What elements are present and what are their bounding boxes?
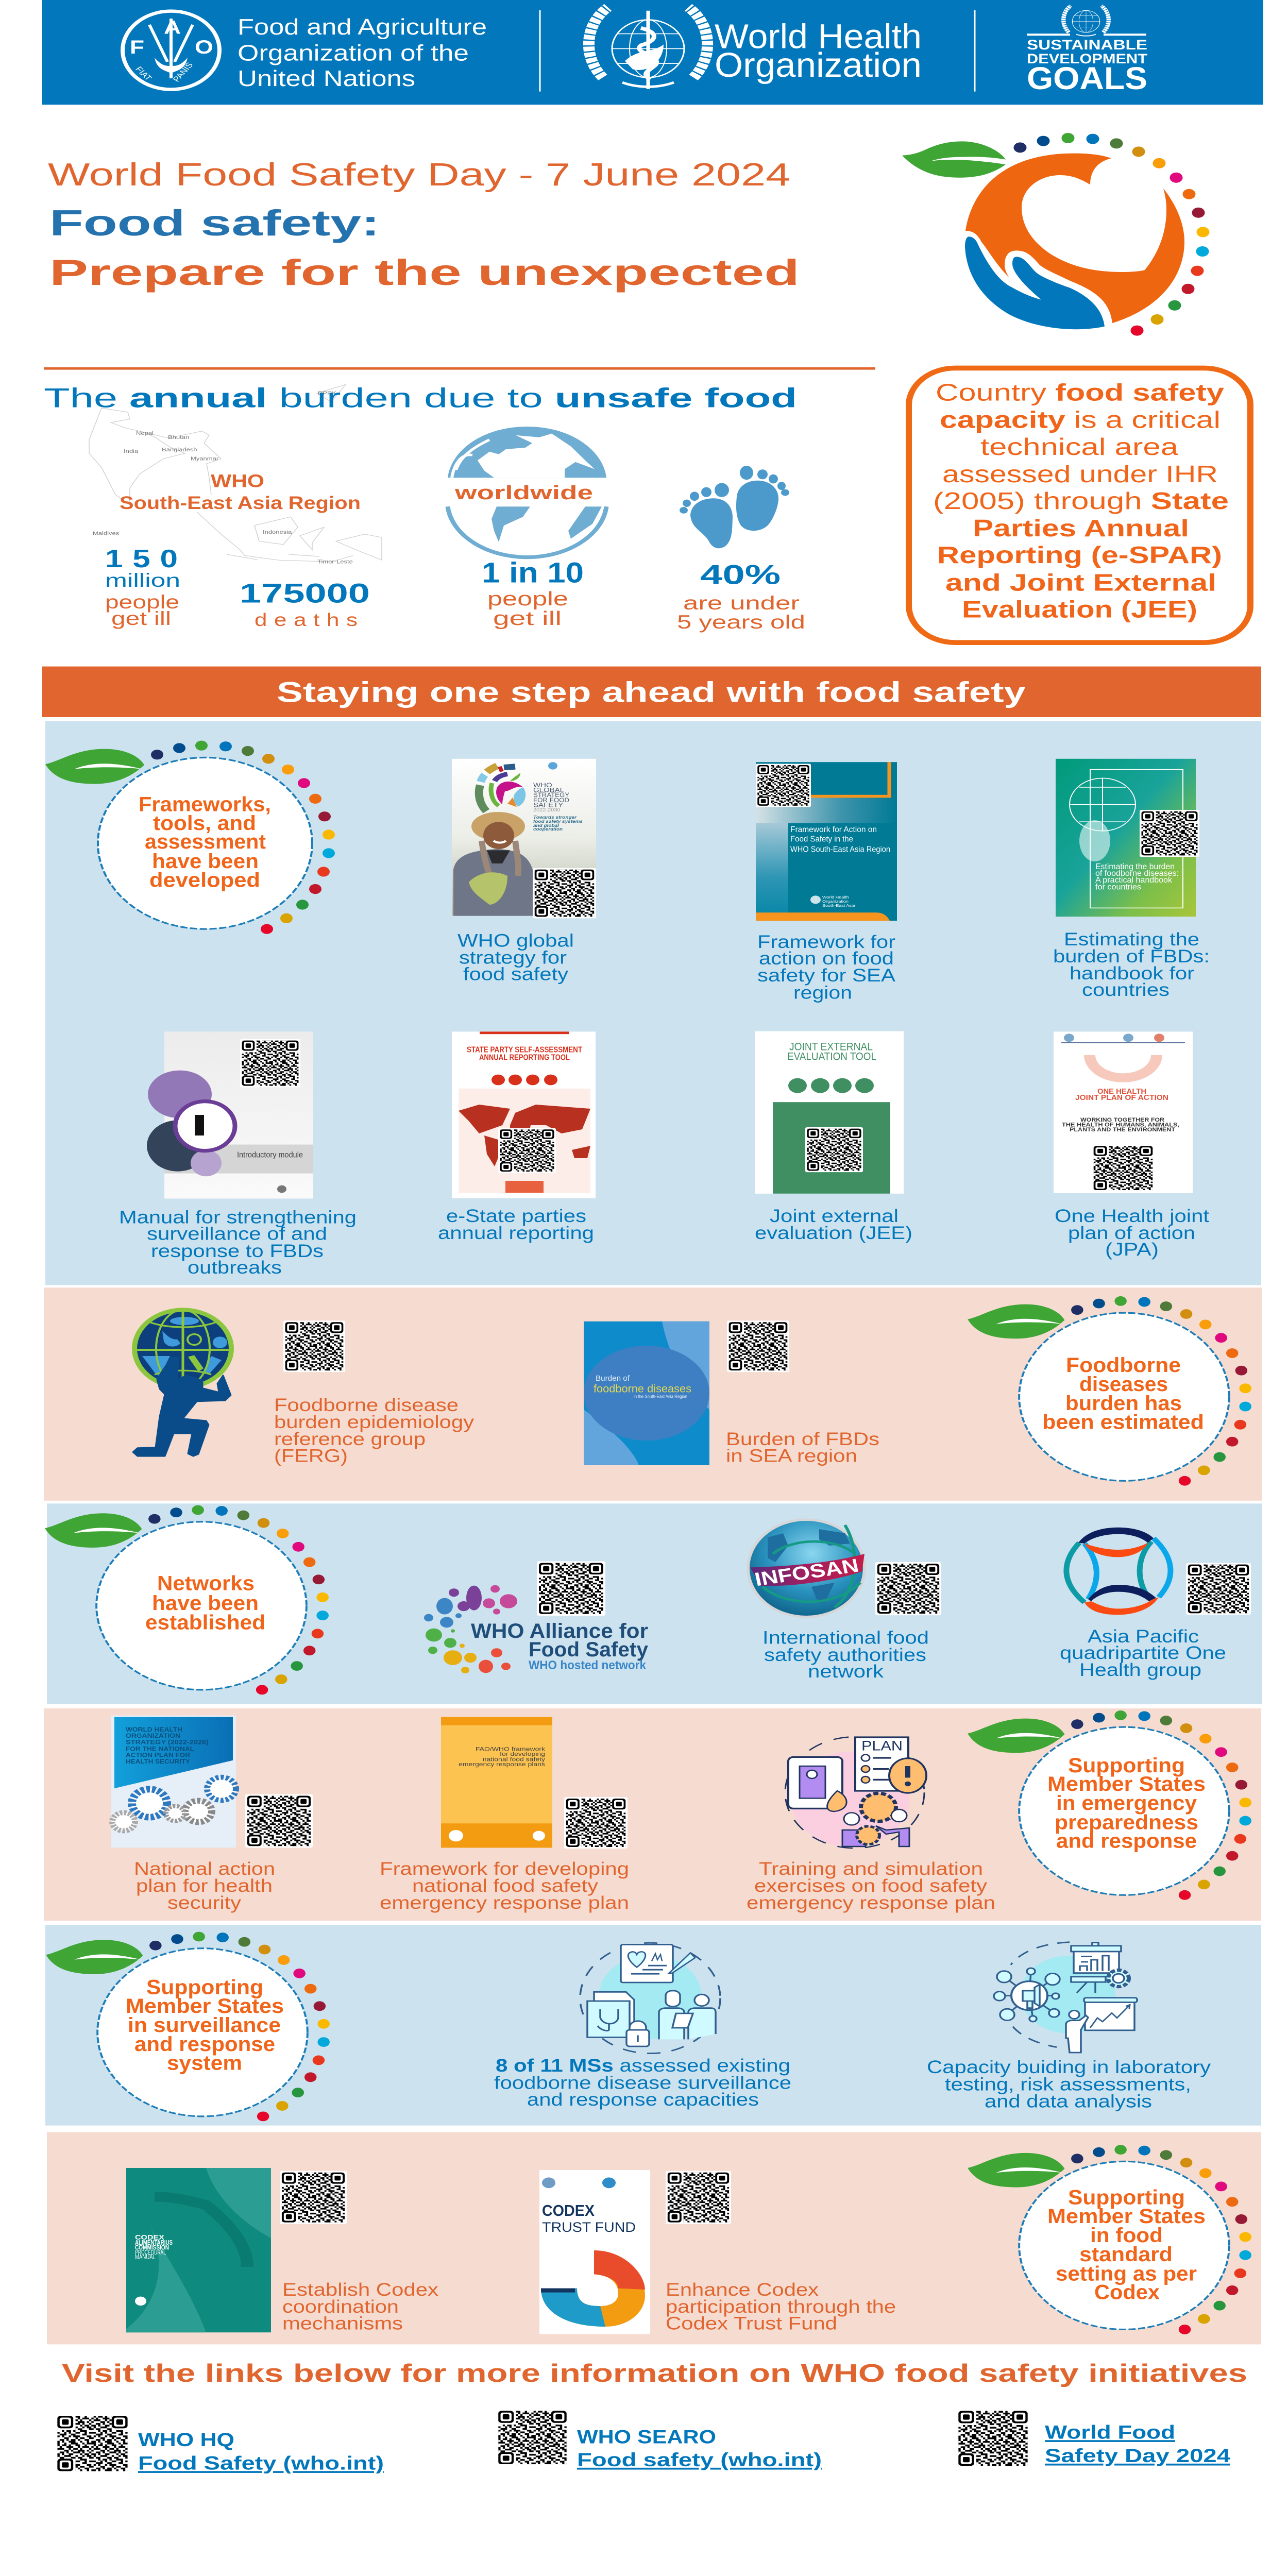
book: framework for action: Organization [822,900,849,904]
labels: bottom row: surveillance of and [147,1224,327,1244]
map: WHO South-East Asia Region: Bangladesh [162,447,197,453]
label: training: Training and simulation [759,1859,983,1879]
book: national action plan: ACTION PLAN FOR [126,1752,190,1758]
book: Codex Trust Fund: CODEX [542,2202,595,2219]
book: framework for action: WHO South-East Asia Region [790,844,890,854]
stat: 40% [677,560,805,633]
label: INFOSAN: International food [762,1628,929,1648]
label: Codex Trust Fund: Enhance Codex [666,2280,819,2300]
QR: framework emergency response [564,1797,628,1849]
badge: burden estimated: burden has [1065,1392,1182,1415]
stat: 1 in 10: 1 in 10 [482,557,584,589]
title block: Prepare for the unexpected [49,252,800,293]
link block: World Food Safety Day: Safety Day 2024 [1045,2445,1230,2466]
book: framework for action [756,762,897,921]
badge: networks: Networks [157,1571,255,1595]
title block: Food safety: [49,202,380,243]
label: INFOSAN [762,1628,929,1682]
badge: surveillance [46,1932,330,2121]
book: state party annual reporting: ANNUAL REPORTING TOOL [479,1053,570,1062]
labels: top row: handbook for [1070,963,1194,984]
map: WHO South-East Asia Region: Indonesia [263,529,292,535]
badge: burden estimated: Foodborne [1066,1353,1181,1377]
labels: top row [457,929,1210,1003]
logo: Asia Pacific quadripartite [1066,1528,1171,1615]
label: Codex coordination: coordination [282,2297,399,2317]
stat: South-East Asia: 175000 [240,578,370,608]
book: framework emergency response: for developing [500,1751,545,1757]
label: FERG: (FERG) [274,1446,348,1466]
SDG logo: GOALS [1027,61,1147,96]
QR: Codex manual [280,2171,347,2224]
stat: 40%: 5 years old [677,611,805,633]
label: Codex coordination: mechanisms [282,2314,403,2334]
logo: WHO Alliance for Food Safety [424,1585,648,1673]
QR: Alliance [537,1561,605,1616]
labels: bottom row [119,1206,1209,1278]
icon: globe: worldwide [454,482,593,504]
stat: South-East Asia: people [105,591,179,613]
badge: networks: have been [152,1591,259,1615]
book: burden of FBDs: foodborne diseases [594,1383,691,1395]
map: WHO South-East Asia Region: DPRK [318,391,336,396]
map: WHO South-East Asia Region: Maldives [93,531,119,536]
labels: top row: WHO global [457,931,574,951]
book: framework emergency response: national food safety [483,1756,546,1762]
label: FBDs [726,1429,879,1466]
badge: Codex standards: standard [1079,2243,1173,2266]
label: Asia Pacific: Asia Pacific [1088,1626,1199,1647]
stat: South-East Asia: 150 [105,544,178,572]
map: WHO South-East Asia Region: Bhutan [168,434,189,440]
book: WHO global strategy: food safety systems [533,819,583,824]
link block: WHO HQ: WHO HQ [138,2429,234,2450]
book: national action plan [111,1716,236,1848]
book: surveillance manual [147,1031,313,1198]
book: WHO global strategy: SAFETY [533,802,563,808]
label: FERG: burden epidemiology [274,1412,474,1432]
badge: emergency preparedness: and response [1056,1829,1197,1852]
badge: Codex standards: Codex [1094,2280,1160,2303]
event logo: apple and hands [902,133,1210,336]
SDG logo: SUSTAINABLE [1027,37,1147,53]
badge: burden estimated: diseases [1079,1372,1168,1396]
book: framework emergency response: emergency response plans [459,1761,545,1768]
label: laboratory capacity [927,2057,1211,2111]
panel: emergency preparedness [44,1708,1261,1921]
callout: food safety capacity: Parties Annual [973,515,1189,541]
heading: annual burden: The annual burden due to unsafe food [44,383,797,413]
book: surveillance manual: Introductory module [237,1150,303,1159]
labels: top row: burden of FBDs: [1053,946,1210,967]
panel: Codex [47,2132,1261,2344]
book: WHO global strategy: WHO [533,782,552,789]
badge: frameworks [45,741,335,934]
book: Codex procedural manual: COMMISSION [135,2244,169,2251]
label: Codex Trust Fund: Codex Trust Fund [666,2314,837,2334]
logo: WHO Alliance for Food Safety: WHO hosted network [529,1658,647,1672]
WHO name: World Health [715,18,922,56]
label: national action plan [134,1859,275,1913]
labels: bottom row: One Health joint [1055,1206,1209,1226]
label: Codex coordination [282,2280,438,2334]
book: national action plan: STRATEGY (2022-2026) [126,1739,209,1745]
QR: FBDs [727,1320,789,1372]
stat: South-East Asia: WHO [211,471,264,492]
stat: South-East Asia: million [105,570,180,591]
book: One Health joint plan: PLANTS AND THE ENVIRONMENT [1070,1126,1175,1133]
map: WHO South-East Asia Region: Myanmar [191,456,218,462]
QR: national action plan [245,1794,313,1848]
FAO logo: A [164,16,181,38]
link block: WHO HQ [55,2414,384,2474]
callout: food safety capacity: assessed under IHR [942,461,1218,488]
badge: networks: established [145,1611,265,1634]
book: joint external evaluation: JOINT EXTERNAL [789,1041,873,1053]
label: national action plan: National action [134,1859,275,1879]
label: Codex Trust Fund [666,2280,896,2334]
title block [48,156,800,293]
callout: food safety capacity: (2005) through State [933,487,1229,515]
link block: WHO HQ: Food Safety (who.int) [138,2452,384,2474]
badge: Codex standards: in food [1090,2224,1163,2247]
stat: South-East Asia [105,471,370,630]
map: WHO South-East Asia Region [89,384,382,565]
book: framework for action: Food Safety in the [790,834,853,843]
label: training [747,1859,995,1913]
link block: World Food Safety Day: World Food [1045,2421,1175,2443]
panel: surveillance [45,1925,1261,2126]
label: framework emergency response: emergency response plan [380,1893,629,1913]
badge: frameworks: Frameworks, [139,792,271,816]
book: One Health joint plan: WORKING TOGETHER FOR [1080,1116,1164,1123]
labels: bottom row: e-State parties [446,1206,586,1226]
badge: emergency preparedness: Member States [1047,1772,1206,1795]
label: framework emergency response [380,1859,629,1913]
map: WHO South-East Asia Region: India [124,448,139,454]
WHO name: Organization [715,46,922,84]
panel: burden estimated [44,1287,1262,1501]
section banner [42,667,1261,717]
badge: Codex standards: setting as per [1056,2262,1197,2285]
callout: food safety capacity: Country food safety [936,379,1224,406]
labels: top row: Framework for [757,932,895,952]
icon: surveillance assessment [580,1943,720,2054]
FAO logo: PANIS [171,61,195,83]
stat: South-East Asia: deaths [255,610,358,630]
badge: emergency preparedness: preparedness [1055,1810,1198,1834]
book: One Health joint plan: ONE HEALTH [1097,1088,1146,1096]
book: burden of FBDs: Burden of [596,1375,630,1383]
label: Asia Pacific [1060,1626,1226,1680]
label: laboratory capacity: and data analysis [985,2091,1152,2111]
WHO emblem [589,7,707,89]
WHO name [715,18,922,84]
stat: 1 in 10: get ill [493,607,562,630]
callout: food safety capacity [909,368,1250,642]
FAO logo: FIAT [133,65,154,82]
badge: surveillance: system [167,2051,242,2074]
book: framework emergency response [441,1717,552,1848]
book: WHO global strategy: cooperation [533,827,563,832]
book: WHO global strategy: Towards stronger [533,815,577,820]
label: laboratory capacity: testing, risk assessments, [945,2075,1191,2095]
labels: top row: region [793,982,852,1003]
stat: South-East Asia: South-East Asia Region [120,493,361,513]
FAO logo [123,11,219,90]
book: state party annual reporting: STATE PARTY SELF-ASSESSMENT [467,1045,582,1054]
link block: WHO SEARO: WHO SEARO [577,2426,716,2447]
SDG logo [1027,6,1147,96]
badge: surveillance: in surveillance [128,2013,281,2037]
FAO name: United Nations [238,65,415,91]
book: state party annual reporting [452,1031,596,1198]
badge: frameworks: developed [149,868,260,891]
label: laboratory capacity: Capacity buiding in laboratory [927,2057,1211,2077]
book: WHO global strategy: and global [533,823,559,828]
label: surveillance assessment: foodborne disease surveillance [494,2073,791,2093]
link block: World Food Safety Day [956,2409,1230,2468]
label: national action plan: plan for health [136,1876,273,1896]
map: WHO South-East Asia Region: Timor-Leste [317,559,353,565]
book: WHO global strategy [452,759,596,918]
FAO name: Organization of the [238,40,469,65]
book: Codex procedural manual: ALIMENTARIUS [135,2239,173,2246]
badge: surveillance: Supporting [146,1975,263,1998]
FAO logo: O [195,36,213,58]
badge: networks [45,1505,329,1694]
book: burden of FBDs: in the South-East Asia Region [634,1394,687,1399]
book: estimating burden handbook: of foodborne diseases: [1095,869,1179,878]
badge: frameworks: have been [152,850,259,873]
labels: bottom row: Joint external [770,1206,899,1226]
FAO name: Food and Agriculture [238,14,487,40]
book: Codex Trust Fund [539,2170,650,2334]
stat: 1 in 10: people [487,588,568,610]
labels: bottom row: plan of action [1068,1223,1195,1243]
labels: bottom row: Manual for strengthening [119,1207,357,1227]
badge: Codex standards: Supporting [1068,2185,1185,2209]
callout: food safety capacity: technical area [980,434,1179,461]
label: training: exercises on food safety [754,1876,987,1896]
logo: INFOSAN [748,1520,865,1617]
labels: bottom row: annual reporting [438,1223,594,1243]
book: estimating burden handbook: Estimating the burden [1095,862,1175,871]
book: One Health joint plan: JOINT PLAN OF ACTION [1075,1094,1168,1102]
book: burden of FBDs [584,1321,709,1465]
book: Codex procedural manual: PROCEDURAL [135,2249,166,2257]
label: framework emergency response: Framework for developing [380,1859,629,1879]
FAO logo: F [130,36,144,58]
badge: emergency preparedness: in emergency [1056,1791,1197,1815]
stat: 40%: 40% [700,560,781,590]
link block: WHO SEARO: Food safety (who.int) [577,2449,822,2470]
QR: Codex Trust Fund [666,2171,731,2224]
labels: top row: Estimating the [1064,929,1199,950]
book: national action plan: WORLD HEALTH [126,1726,182,1733]
label: framework emergency response: national food safety [412,1876,598,1896]
label: surveillance assessment: and response capacities [527,2090,759,2110]
badge: frameworks: assessment [145,830,266,853]
badge: burden estimated [968,1296,1251,1486]
label: INFOSAN: network [808,1662,884,1682]
labels: bottom row: (JPA) [1105,1240,1159,1260]
labels: top row: safety for SEA [757,965,895,986]
callout: food safety capacity: capacity is a critical [940,406,1221,433]
book: Codex procedural manual [126,2168,271,2332]
book: framework for action: Framework for Action on [790,825,877,834]
badge: surveillance: and response [134,2032,275,2056]
icon: training plan: PLAN [861,1738,903,1754]
book: WHO global strategy: GLOBAL [533,787,565,793]
QR: INFOSAN [875,1562,941,1615]
callout: food safety capacity: Evaluation (JEE) [962,596,1197,623]
book: national action plan: HEALTH SECURITY [126,1758,190,1765]
label: Codex Trust Fund: participation through the [666,2297,896,2317]
icon: baby feet [680,466,789,548]
label: Asia Pacific: quadripartite One [1060,1643,1226,1663]
icon: laboratory capacity [994,1942,1137,2053]
map: WHO South-East Asia Region: Nepal [136,430,154,436]
icon: globe [448,427,606,557]
label: FBDs: in SEA region [726,1446,857,1466]
book: framework for action: South-East Asia [822,904,855,908]
label: INFOSAN: safety authorities [764,1645,926,1665]
logo: INFOSAN: INFOSAN [753,1554,861,1590]
book: national action plan: ORGANIZATION [126,1732,180,1739]
SDG logo: DEVELOPMENT [1027,50,1147,66]
label: surveillance assessment: 8 of 11 MSs assessed existing [496,2056,790,2076]
stat: 1 in 10 [482,557,584,630]
book: estimating burden handbook: A practical handbook [1095,875,1173,884]
logo: WHO Alliance for Food Safety: Food Safety [529,1638,648,1661]
label: Asia Pacific: Health group [1079,1660,1201,1680]
book: Codex Trust Fund: TRUST FUND [542,2219,636,2235]
book: estimating burden handbook [1056,759,1199,917]
logo: WHO Alliance for Food Safety: WHO Alliance for [471,1619,648,1642]
section banner: Staying one step ahead with food safety [277,676,1026,708]
book: joint external evaluation [755,1031,904,1194]
book: One Health joint plan [1054,1031,1193,1193]
header banner [42,0,1263,105]
callout: food safety capacity: and Joint External [945,569,1216,596]
label: training: emergency response plan [747,1893,995,1913]
label: surveillance assessment [494,2056,791,2110]
label: FBDs: Burden of FBDs [726,1429,879,1449]
callout: food safety capacity: Reporting (e-SPAR) [937,541,1222,568]
label: national action plan: security [167,1893,241,1913]
badge: emergency preparedness [968,1710,1251,1900]
labels: bottom row: outbreaks [188,1258,282,1278]
book: One Health joint plan: THE HEALTH OF HUMANS, ANIMALS, [1062,1122,1179,1128]
icon: figure holding globe [133,1310,231,1456]
label: FERG [274,1395,474,1466]
label: FERG: Foodborne disease [274,1395,459,1415]
panel: networks [45,1503,1262,1704]
icon: training plan [785,1737,926,1848]
book: WHO global strategy: 2022-2030 [533,808,561,813]
QR: FERG [283,1320,345,1372]
stat: South-East Asia: get ill [111,607,171,629]
badge: Codex standards: Member States [1047,2205,1206,2228]
badge: burden estimated: been estimated [1042,1410,1204,1433]
book: framework emergency response: FAO/WHO framework [476,1746,546,1752]
heading: visit links: Visit the links below for more information on WHO food safety initiatives [62,2359,1247,2387]
label: Codex coordination: Establish Codex [282,2280,438,2300]
panel: frameworks and tools [45,721,1261,1285]
book: national action plan: FOR THE NATIONAL [126,1745,194,1752]
badge: Codex standards [968,2145,1251,2334]
book: joint external evaluation: EVALUATION TOOL [787,1050,876,1062]
book: estimating burden handbook: for countries [1095,882,1141,891]
label: FERG: reference group [274,1429,426,1449]
book: Codex procedural manual: CODEX [135,2234,164,2242]
badge: emergency preparedness: Supporting [1068,1754,1185,1777]
book: WHO global strategy: FOR FOOD [533,796,569,803]
book: framework for action: World Health [822,895,849,900]
book: Codex procedural manual: MANUAL [135,2253,156,2261]
book: WHO global strategy: STRATEGY [533,792,569,799]
badge: surveillance: Member States [126,1994,284,2018]
labels: top row: food safety [463,964,568,984]
link block: WHO SEARO [496,2409,822,2470]
labels: bottom row: response to FBDs [151,1241,324,1261]
labels: top row: action on food [759,948,894,969]
title block: World Food Safety Day - 7 June 2024 [48,156,790,192]
labels: top row: strategy for [459,947,567,968]
QR: Asia Pacific [1186,1563,1251,1615]
stat: 40%: are under [683,592,800,614]
FAO name [238,14,487,91]
labels: top row: countries [1082,980,1170,1000]
badge: frameworks: tools, and [153,811,256,835]
labels: bottom row: evaluation (JEE) [755,1223,912,1243]
